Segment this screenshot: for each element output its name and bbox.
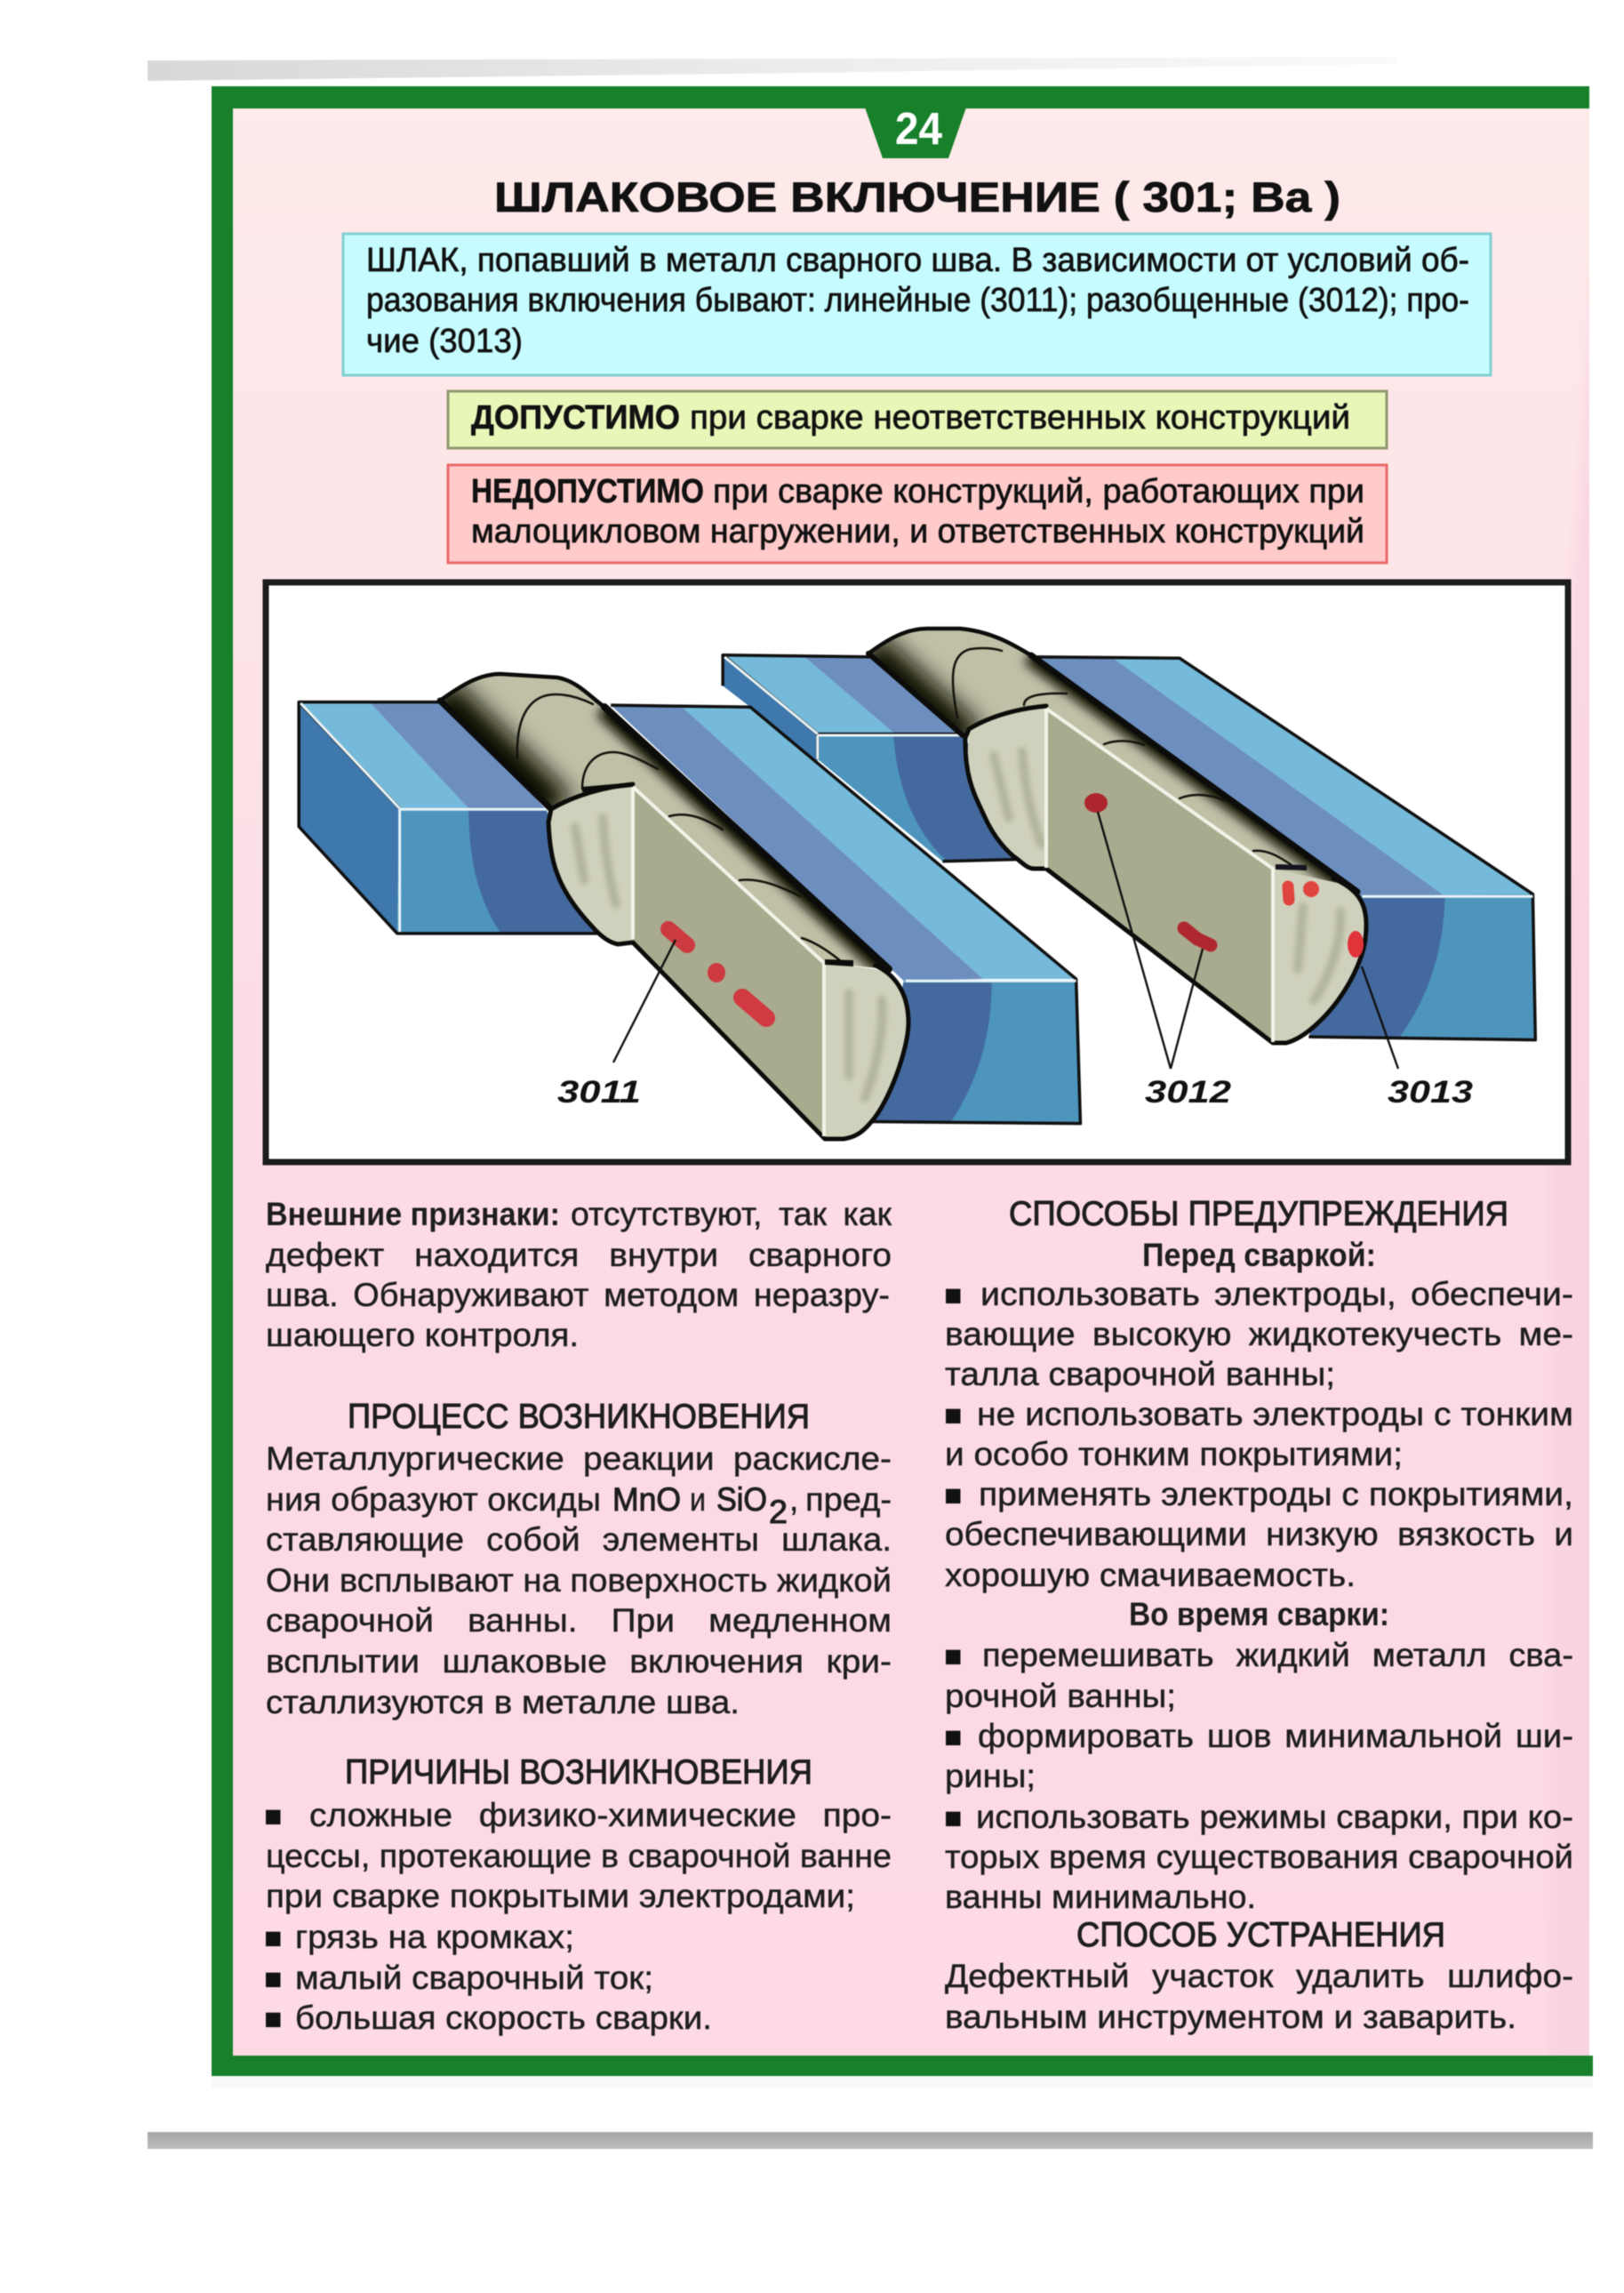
causes list: ■	[264, 1962, 283, 1996]
right weld far section	[967, 709, 1046, 869]
before welding list: хорошую смачиваемость.	[945, 1557, 1356, 1593]
repair text	[945, 1958, 1573, 2035]
causes list: при сварке покрытыми электродами;	[266, 1878, 855, 1914]
scan shadow strip top	[148, 57, 1397, 81]
causes list: ■	[264, 2002, 283, 2036]
before welding list: талла сварочной ванны;	[945, 1356, 1335, 1392]
external signs text: шающего контроля.	[266, 1317, 579, 1353]
before welding list: ■	[944, 1279, 963, 1312]
not allowed box: НЕДОПУСТИМО	[471, 473, 704, 510]
before welding list: применять электроды с покрытиями,	[979, 1476, 1573, 1512]
external signs text: Внешние признаки:	[266, 1196, 560, 1232]
before welding list: обеспечивающими низкую вязкость и	[945, 1516, 1573, 1552]
causes list: большая скорость сварки.	[295, 2000, 712, 2036]
subheading: during welding: Во время сварки:	[1129, 1596, 1389, 1632]
right weld near section	[1273, 869, 1366, 1043]
process text: всплытии шлаковые включения кри-	[266, 1643, 892, 1680]
causes list	[264, 1797, 892, 2036]
during welding list: ■	[944, 1720, 963, 1754]
causes list: ■	[264, 1921, 283, 1955]
not allowed box: малоцикловом нагружении, и ответственных конструкций	[471, 513, 1364, 550]
during welding list: рочной ванны;	[945, 1678, 1176, 1714]
label 3013: 3013	[1388, 1075, 1474, 1110]
page number tab: 24	[895, 103, 943, 154]
external signs text: дефект находится внутри сварного	[266, 1237, 892, 1273]
weld diagram panel	[266, 582, 1568, 1162]
left weld inclusions	[668, 929, 766, 1018]
process text: ния образуют оксиды	[266, 1481, 601, 1518]
before welding list: ■	[944, 1399, 963, 1432]
leader lines	[613, 812, 1398, 1069]
page panel	[212, 86, 1600, 2076]
heading: repair: СПОСОБ УСТРАНЕНИЯ	[1076, 1916, 1445, 1954]
process text: ,	[789, 1481, 798, 1518]
definition box: чие (3013)	[366, 323, 523, 360]
label 3012: 3012	[1145, 1075, 1232, 1110]
repair text: вальным инструментом и заварить.	[945, 1999, 1516, 2035]
process text: 2	[769, 1494, 788, 1530]
allowed box	[448, 391, 1387, 448]
external signs text: шва. Обнаруживают методом неразру-	[266, 1277, 890, 1313]
process text: сварочной ванны. При медленном	[266, 1602, 892, 1639]
process text: Они всплывают на поверхность жидкой	[266, 1562, 892, 1599]
right specimen plates	[723, 655, 1535, 1040]
external signs text: отсутствуют, так как	[571, 1196, 892, 1232]
process text: сталлизуются в металле шва.	[266, 1684, 740, 1720]
title: ШЛАКОВОЕ ВКЛЮЧЕНИЕ ( 301; Ва )	[494, 173, 1340, 220]
during welding list: ■	[944, 1801, 963, 1835]
right weld cut plane	[1046, 709, 1273, 1043]
process text: Металлургические реакции раскисле-	[266, 1440, 892, 1477]
process text: SiO	[716, 1481, 767, 1518]
during welding list: ванны минимально.	[945, 1879, 1256, 1915]
repair text: Дефектный участок удалить шлифо-	[945, 1958, 1573, 1994]
process text	[266, 1440, 892, 1720]
scan shadow strip bottom	[148, 2132, 1593, 2149]
speckled edge under frame	[212, 2077, 1593, 2088]
left specimen plates	[299, 702, 1080, 1124]
definition box: разования включения бывают: линейные (3011); разобщенные (3012); про-	[366, 282, 1469, 319]
heading: process: ПРОЦЕСС ВОЗНИКНОВЕНИЯ	[348, 1398, 810, 1436]
before welding list: и особо тонким покрытиями;	[945, 1436, 1403, 1472]
allowed box: ДОПУСТИМО	[471, 399, 680, 437]
right weld bead	[867, 629, 1366, 1043]
left weld near section	[824, 963, 908, 1137]
before welding list: ■	[944, 1479, 963, 1512]
causes list: ■	[264, 1800, 283, 1833]
during welding list: формировать шов минимальной ши-	[978, 1718, 1573, 1754]
during welding list: торых время существования сварочной	[945, 1839, 1573, 1875]
heading: causes: ПРИЧИНЫ ВОЗНИКНОВЕНИЯ	[345, 1753, 812, 1792]
left weld cut plane	[633, 787, 824, 1137]
allowed box: при сварке неответственных конструкций	[690, 399, 1350, 437]
during welding list: перемешивать жидкий металл сва-	[982, 1637, 1573, 1673]
process text: MnO	[612, 1481, 681, 1518]
label 3011: 3011	[557, 1075, 641, 1110]
not allowed box	[448, 465, 1387, 563]
during welding list: ■	[944, 1640, 963, 1673]
before welding list: использовать электроды, обеспечи-	[980, 1276, 1573, 1312]
causes list: сложные физико-химические про-	[309, 1797, 892, 1833]
page number tab	[864, 103, 967, 158]
during welding list: рины;	[945, 1758, 1036, 1794]
during welding list: использовать режимы сварки, при ко-	[976, 1799, 1573, 1835]
process text: ставляющие собой элементы шлака.	[266, 1521, 892, 1558]
before welding list	[944, 1276, 1573, 1593]
left weld far section	[549, 787, 633, 944]
before welding list: не использовать электроды с тонким	[977, 1396, 1573, 1432]
definition box	[343, 234, 1491, 375]
external signs text	[266, 1196, 892, 1353]
before welding list: вающие высокую жидкотекучесть ме-	[945, 1316, 1573, 1352]
causes list: грязь на кромках;	[295, 1919, 574, 1955]
process text: пред-	[805, 1481, 892, 1518]
during welding list	[944, 1637, 1573, 1915]
text columns	[264, 1195, 1573, 2036]
definition box: ШЛАК, попавший в металл сварного шва. В зависимости от условий об-	[366, 242, 1469, 279]
left weld bead	[436, 674, 908, 1139]
right weld inclusions	[1084, 793, 1364, 958]
green frame	[212, 86, 1593, 2076]
causes list: цессы, протекающие в сварочной ванне	[266, 1838, 892, 1874]
heading: prevention: СПОСОБЫ ПРЕДУПРЕЖДЕНИЯ	[1009, 1195, 1508, 1233]
not allowed box: при сварке конструкций, работающих при	[713, 473, 1364, 510]
subheading: before welding: Перед сваркой:	[1142, 1237, 1376, 1273]
causes list: малый сварочный ток;	[295, 1960, 653, 1996]
process text: и	[690, 1481, 706, 1518]
